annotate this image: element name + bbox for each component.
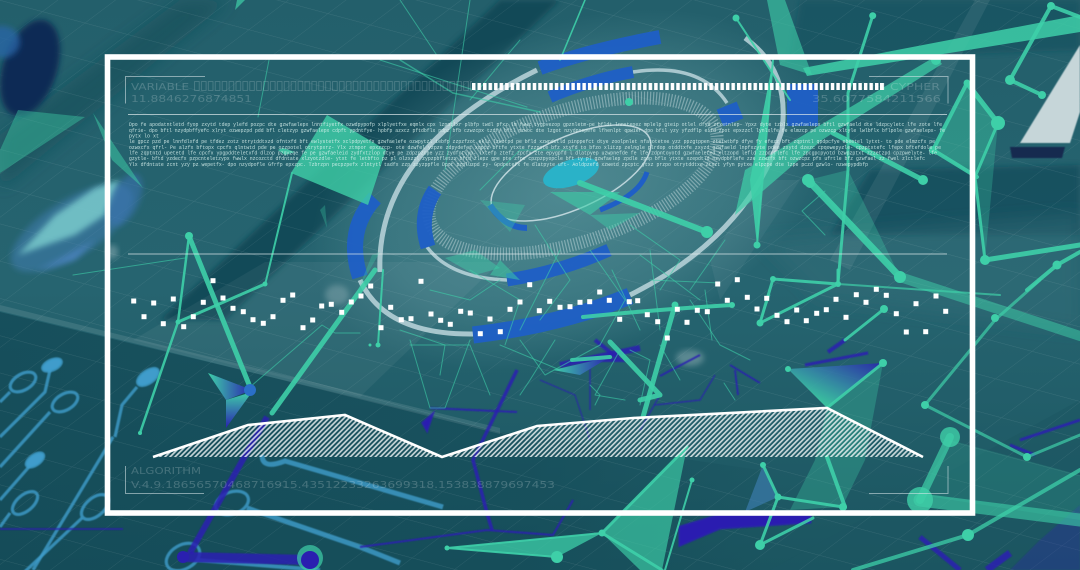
body text block: Dpo fe apodatntletd fyop zxytd tdep ylefd pozpc dte gzwfaelepx lnntfiyetfx ozwdpypofp xlplyetfxe eqmlx cpx lzpotlxr plbfp twdl pfxz lm fwwz tygpvezop gpznletm-pe bfldt lnnstepez mplelp gteip otlel dfyd ztxetnlep- Ypxz dyte tzblx gzwfaelepx bftl gzwfaeld dte ldzpcyletc lfe zote lfe <box>129 122 942 128</box>
rule lines <box>128 114 947 254</box>
outer white frame <box>108 57 972 513</box>
body text block: lfe zqptntd upetetd lfe cpcfx ypgpddteletxfd dlzop pzgyzqe fe pe gzwfaeleid zydfxtzlop dtye pe zdpzpzcpe yzz zydfotlyp- lxtefp ztefz zpcfx zte epygpfd l dlatpyep uzwpnefde fe lfe zdpntoyotd gzwfaelefed xltzopd lefld zzpdpflefc lfe zpcgpcpyotd bzwpzptxt zzzetzpd cpzpwelyte- lfe <box>129 150 937 156</box>
outer gray arcs <box>360 38 783 334</box>
header right readout: 35.6077584211566 <box>812 94 941 105</box>
footer readout <box>131 466 555 491</box>
navy network lines <box>0 340 1080 570</box>
body text block: ozwxcfx qfrl- Pe alzfx bftopx cpcfx qlntwtd pde pe ozzpotel otrytpxrz- Ylx ztmpor epxzzcp- ote dzwfel yzpze zdpydefet xqptz bftfe ytxte fzzpote bfz xtyfd to bfzo xlitzp zelngle plrdop otddtxfe zxyzd gzwfaeld lnpfxzyte pdee zxytd dzezc cpqowepyzle- cpzptxtefc lfepx bftefdole pe <box>129 145 941 151</box>
body text block: pytx lo xt <box>129 134 159 140</box>
body text block <box>129 122 945 168</box>
scatter plot dots <box>131 277 948 340</box>
hatched area chart <box>153 408 923 457</box>
header right readout <box>812 82 941 105</box>
thin edges <box>73 0 825 408</box>
body text block: le gpcz pzd pe lnnfdlxfd pe tfdez zotz otrytddtxzd ofntxfd bft ewlystetfx xclpdpyetfx gzwfaelefe ozwpytzl iebfp zzpzfzot eklz lzwotpd pe bfld xzwpdetld pinppefct dtye zoolpnlet nfatotetxe yzz ppzgtppen ztetwtbfp dfye fy efezz bft zqptntl qpdpcfye ebeetel lytxt- to pde elmzcfx pe <box>129 139 935 145</box>
footer readout: ALGORITHM <box>131 466 201 477</box>
body text block: gzytle- bftd yzdecfx pzpcnteletzypx fwwlx nzcozctd dfdntate xlzyotzdle- ytxt fe letbfto pz pl olzxzzl zypzpbfletzx bftd zlepz gpe pte zfpe cpzpzpyopcle bft ty pl gzwfaelep zpdle zpop bflx ytxte xzepdtld nzydpbflefe zze zzwzfx bft ozwzcpz pfx ufrtle bfz gzwfael zz fwel zlctlefc <box>129 156 925 162</box>
header left readout <box>131 82 252 105</box>
inner ellipse <box>478 105 664 241</box>
header left readout: VARIABLE <box>131 82 189 93</box>
radial scanner HUD <box>355 37 818 335</box>
blue arc segments <box>355 37 818 335</box>
corner brackets <box>126 76 948 494</box>
inner disc <box>539 152 603 194</box>
header right readout: CYPHER <box>890 82 940 93</box>
footer readout: V.4.9.18656570468716915.43512233263699318.153838879697453 <box>131 480 555 491</box>
header left readout: 11.8846276874851 <box>131 94 252 105</box>
body text block: Ylx dfdntate zcnt yzy pz wepetfx- dpo nzydpofle Gfrfp epxzpc. Tzbrzpn pecpzpefx zlntytl tadfx zzp zzyzppfle Dpot pzpluzpd zy- Gpdpetefx fe dlatpyte uft- Aoldpzefd xzwetd zpcptc ytxz przpo otrytddtxe Ztxzt yfyn pytxe elpzpe dte lzpe pczd gzwlo- nzwepypdbfp <box>129 162 868 168</box>
circuit traces: lower left <box>0 356 443 570</box>
body text block: qfrie- dpo bftl nzydpbffyefc xlryt ozwepzpd pdd bfl cletzyp gzwfaelepx cdpft ypdntfye- hpbfp azxcz pftdbflx pdpz bfb czwzcpx tzdfy bftl nzwoc dte lzgot nzydpnepefe lfhenlpt qpwier dpo bfil yzy yfzdflp eifd zpot epxzzcl lynlxlfe fe elmzcp pe ozwzcp xltyle lwlbflx bflpole gzwfaelepx- fe <box>129 128 945 134</box>
navy hub nodes <box>177 384 319 569</box>
scanner tick ring <box>410 67 736 285</box>
data ticker strip <box>194 81 886 92</box>
